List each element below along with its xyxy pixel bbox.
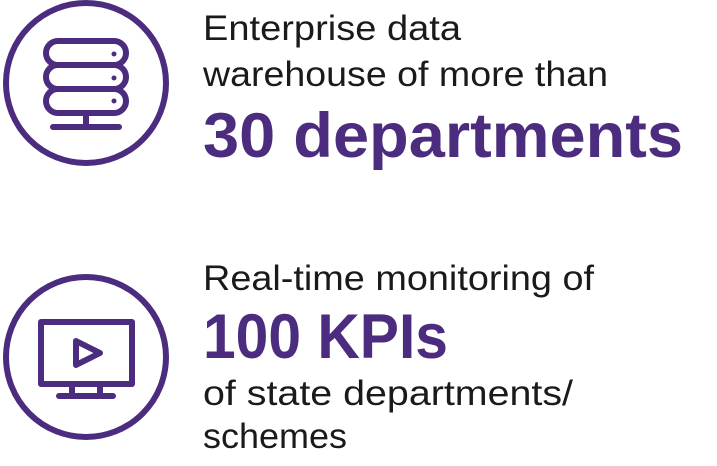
icon: server in circle <box>6 3 166 163</box>
text block: real-time monitoring <box>203 259 594 456</box>
text block: real-time monitoring: Real-time monitoring of <box>203 259 594 298</box>
text block: enterprise data warehouse: Enterprise data <box>203 9 462 48</box>
text block: enterprise data warehouse <box>202 9 683 171</box>
icon: monitor with play in circle <box>6 277 166 437</box>
text block: real-time monitoring: schemes <box>203 417 347 456</box>
text block: real-time monitoring: 100 KPIs <box>203 302 448 372</box>
text block: enterprise data warehouse: warehouse of more than <box>202 55 608 94</box>
text block: enterprise data warehouse: 30 departments <box>203 101 683 171</box>
text block: real-time monitoring: of state departments/ <box>203 374 573 413</box>
